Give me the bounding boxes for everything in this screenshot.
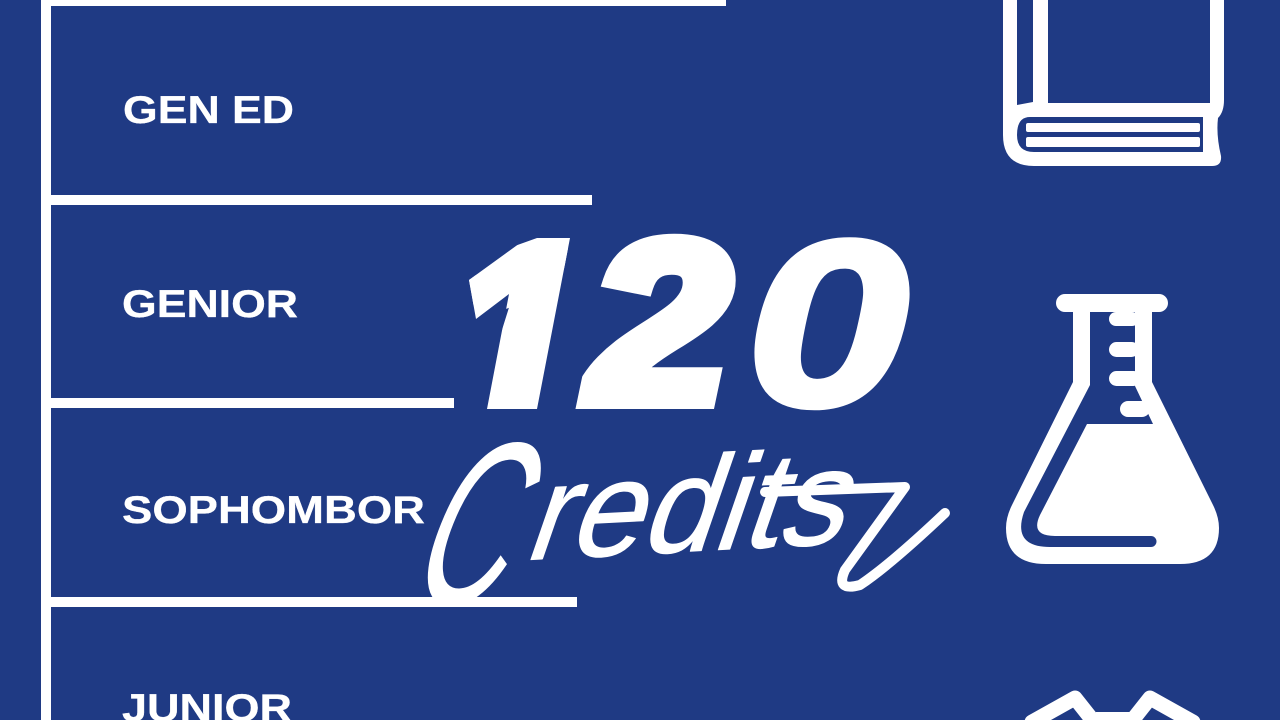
headline number: 1 [405,187,656,500]
label: senior: GENIOR [122,283,298,326]
row labels [122,89,425,720]
script word: credits: C [382,396,580,654]
headline number: 0 [746,192,909,456]
label: sophomore: SOPHOMBOR [122,489,425,532]
timeline bracket: vertical rule and horizontal dividers [41,0,726,720]
icon: book [1003,0,1224,166]
headline number [469,234,910,410]
label: gen ed: GEN ED [123,89,294,132]
script word: credits: redits [512,421,882,590]
icon: flask [1006,294,1219,564]
script word: credits [382,396,945,654]
icon: shirt collar [1032,698,1193,720]
headline number: 2 [586,195,729,450]
